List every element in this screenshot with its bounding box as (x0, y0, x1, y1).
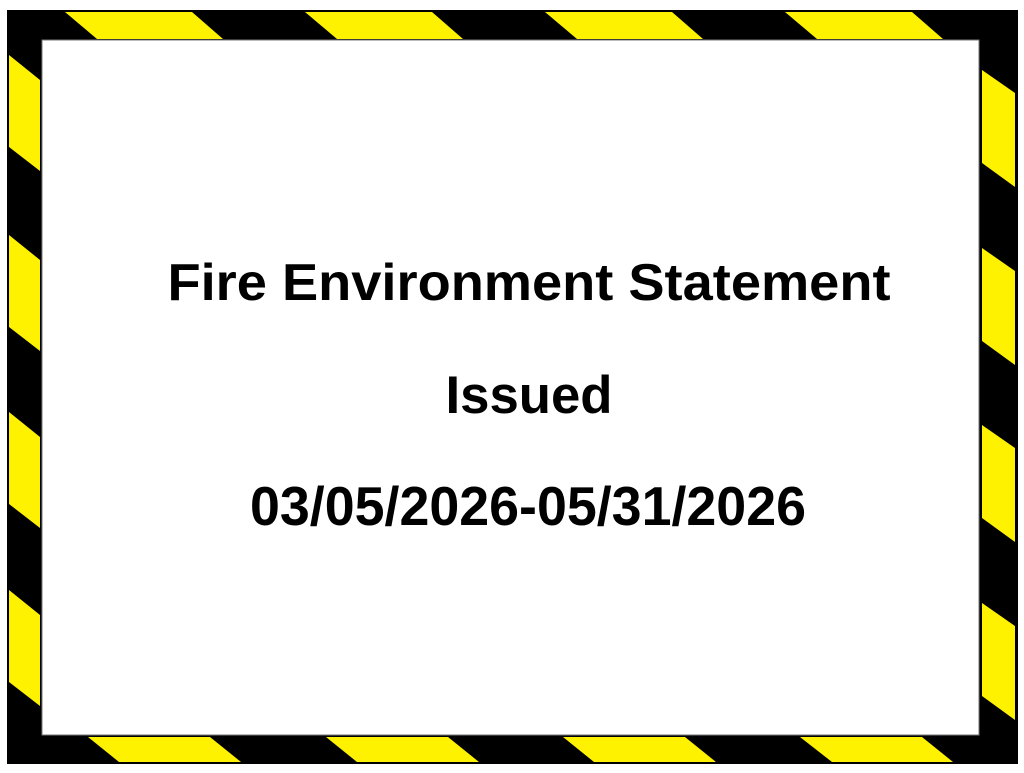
left stripes (9, 55, 40, 706)
right stripes (982, 70, 1015, 720)
top stripes (65, 12, 943, 39)
bottom stripes (88, 737, 953, 762)
issued label: Issued (446, 366, 612, 425)
date range: 03/05/2026-05/31/2026 (250, 475, 806, 537)
title: Fire Environment Statement (168, 254, 890, 312)
